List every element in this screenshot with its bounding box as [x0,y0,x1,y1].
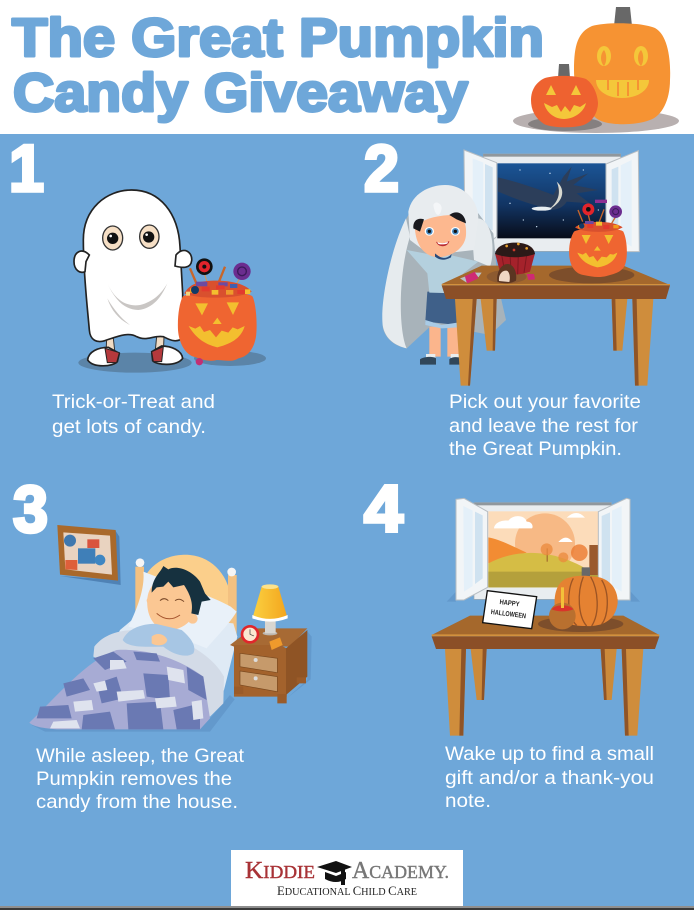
title: The Great Pumpkin [12,8,544,68]
caption 1: get lots of candy. [52,416,206,438]
number 3: 3 [13,472,48,546]
illustration: ghost with pumpkin [74,190,266,373]
caption 3: Pumpkin removes the [36,768,232,790]
boy [123,566,211,656]
panel: step 1 [9,131,266,438]
logo: Kiddie Academy: ACADEMY. [352,858,449,884]
icon: graduation cap [317,861,352,885]
number 2: 2 [364,131,399,205]
caption 1: Trick-or-Treat and [52,391,215,413]
caption 4: note. [445,790,491,812]
caption 3 [36,745,245,813]
window at night [464,150,639,252]
logo: Kiddie Academy [231,850,463,906]
table [432,616,659,736]
header band [0,0,694,134]
pumpkin bucket [178,258,257,365]
caption 2 [449,391,641,460]
logo: Kiddie Academy: KIDDIE [245,858,315,884]
illustration: table with gift [432,498,659,736]
title [12,8,544,123]
bed [32,555,237,732]
number 1: 1 [9,131,44,205]
caption 4: gift and/or a thank-you [445,767,654,789]
illustration: child at table [382,150,670,386]
nightstand with lamp and clock [230,584,312,703]
caption 2: Pick out your favorite [449,391,641,413]
caption 3: While asleep, the Great [36,745,245,767]
number 4: 4 [364,471,403,545]
caption 1 [52,391,215,438]
logo: Kiddie Academy: EDUCATIONAL CHILD CARE [277,883,417,898]
card: happy halloween: HAPPY [499,599,520,608]
table [442,266,670,386]
caption 3: candy from the house. [36,791,238,813]
pumpkin with candy [569,200,627,277]
icon: header pumpkins [513,7,679,133]
bottom edge line [0,906,694,910]
caption 4: Wake up to find a small [445,743,654,765]
panel: step 2 [364,131,670,460]
pumpkin and apple [549,567,618,629]
panel: step 3 [13,472,312,813]
card: happy halloween: HALLOWEEN [490,609,526,620]
child in ghost sheet [382,185,506,365]
caption 4 [445,743,654,812]
cupcake and candies [460,243,535,283]
caption 2: and leave the rest for [449,415,639,437]
quilt [29,650,210,729]
window with autumn view [447,498,640,602]
picture frame [57,525,121,585]
card: happy halloween [483,591,537,629]
panel: step 4 [364,471,659,812]
title: Candy Giveaway [13,63,468,123]
caption 2: the Great Pumpkin. [449,438,622,460]
illustration: boy asleep [29,525,312,732]
